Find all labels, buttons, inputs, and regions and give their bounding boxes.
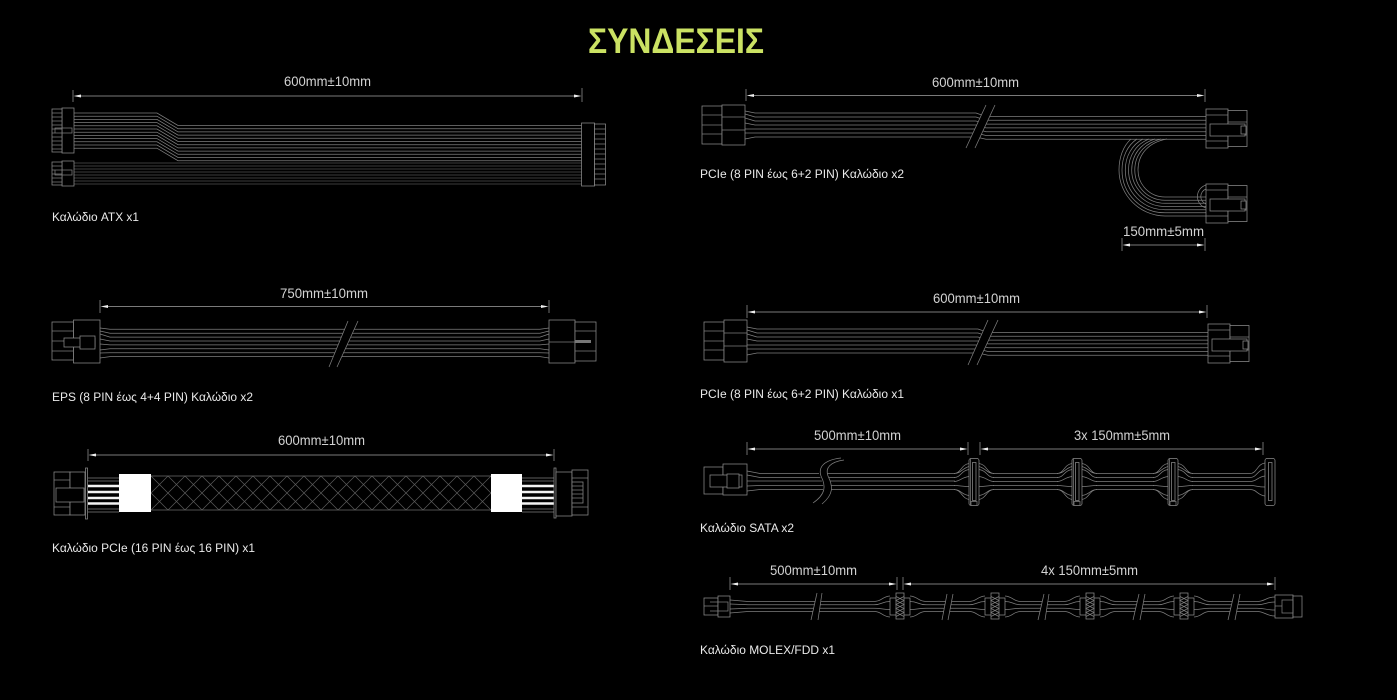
dimension: EPS length [100,285,549,313]
title: ΣΥΝΔΕΣΕΙΣ [588,22,764,61]
dimension: SATA first length: 500mm±10mm [814,427,901,443]
dimension: MOLEX branch length [903,562,1275,590]
dimension: ATX length: 600mm±10mm [284,73,371,89]
SATA connector 3 [1153,458,1193,506]
panel: SATA cable [700,427,1275,535]
caption: PCIe 16 pin: Καλώδιο PCIe (16 PIN έως 16 PIN) x1 [52,543,255,555]
SATA connector 1 [954,458,994,506]
EPS wires [100,328,549,358]
right white sleeve block [491,474,522,512]
dimension: branch length [1122,223,1205,251]
dimension: MOLEX first length: 500mm±10mm [770,562,857,578]
ATX wires [74,113,582,184]
MOLEX connector 2 [969,593,1021,619]
main wires [745,111,1206,139]
dimension: main length [746,74,1205,102]
left wires [88,478,119,512]
panel: ATX cable [52,73,606,224]
dimension: MOLEX branch length: 4x 150mm±5mm [1041,562,1138,578]
left white sleeve block [119,474,151,512]
PCIe 16 pin left connector [54,468,88,519]
MOLEX connector 4 [1158,593,1210,619]
dimension: ATX length [73,73,582,102]
break mark [966,105,995,148]
panel: MOLEX/FDD cable [700,562,1302,657]
SATA connector 2 [1057,458,1097,506]
ATX left connector, lower [52,161,74,186]
MOLEX break marks [811,593,1240,620]
PCIe x1 break mark [968,320,998,365]
PCIe x1 wires [747,327,1208,355]
dimension: PCIe 16 pin length [88,432,554,461]
dimension: PCIe x1 length: 600mm±10mm [933,290,1020,306]
caption: MOLEX: Καλώδιο MOLEX/FDD x1 [700,645,835,657]
SATA end connector [1250,458,1275,506]
right wires [522,478,554,512]
dimension: SATA branch length: 3x 150mm±5mm [1074,427,1170,443]
dimension: SATA branch length [980,427,1263,455]
branch wires curve [1119,139,1206,216]
right connector, branch [1206,184,1247,223]
SATA break mark [813,458,844,504]
dimension: PCIe 16 pin length: 600mm±10mm [278,432,365,448]
MOLEX connector 3 [1064,593,1116,619]
dimension: SATA first length [747,427,968,455]
caption: EPS: EPS (8 PIN έως 4+4 PIN) Καλώδιο x2 [52,392,253,404]
caption: PCIe x1: PCIe (8 PIN έως 6+2 PIN) Καλώδιο x1 [700,389,904,401]
caption: ATX: Καλώδιο ATX x1 [52,212,139,224]
dimension: branch length: 150mm±5mm [1123,223,1204,239]
MOLEX end connector [1275,595,1302,618]
caption: PCIe x2: PCIe (8 PIN έως 6+2 PIN) Καλώδιο x2 [700,169,904,181]
EPS left connector [52,320,100,363]
panel: PCIe 16 pin cable [52,432,588,555]
SATA wires [747,471,1250,491]
right connector, main [1206,109,1247,148]
left connector [702,105,745,145]
SATA left connector [704,464,747,495]
EPS break mark [329,321,358,367]
ATX right connector [582,123,606,186]
panel: PCIe cable x2 [700,74,1247,251]
MOLEX wires [730,597,1275,616]
PCIe x1 right connector [1208,324,1249,363]
EPS right connector [549,320,596,363]
caption: SATA: Καλώδιο SATA x2 [700,523,794,535]
panel: PCIe cable x1 [700,290,1249,401]
PCIe 16 pin right connector [554,468,588,518]
dimension: EPS length: 750mm±10mm [280,285,368,301]
panel: EPS cable [52,285,596,404]
MOLEX connector 1 [874,593,926,619]
dimension: PCIe x1 length [747,290,1207,318]
dimension: main length: 600mm±10mm [932,74,1019,90]
ATX left connector, upper [52,108,74,153]
PCIe x1 left connector [704,320,747,362]
dimension: MOLEX first length [730,562,897,590]
braided mesh sleeve [151,476,491,510]
MOLEX left connector [704,596,730,617]
